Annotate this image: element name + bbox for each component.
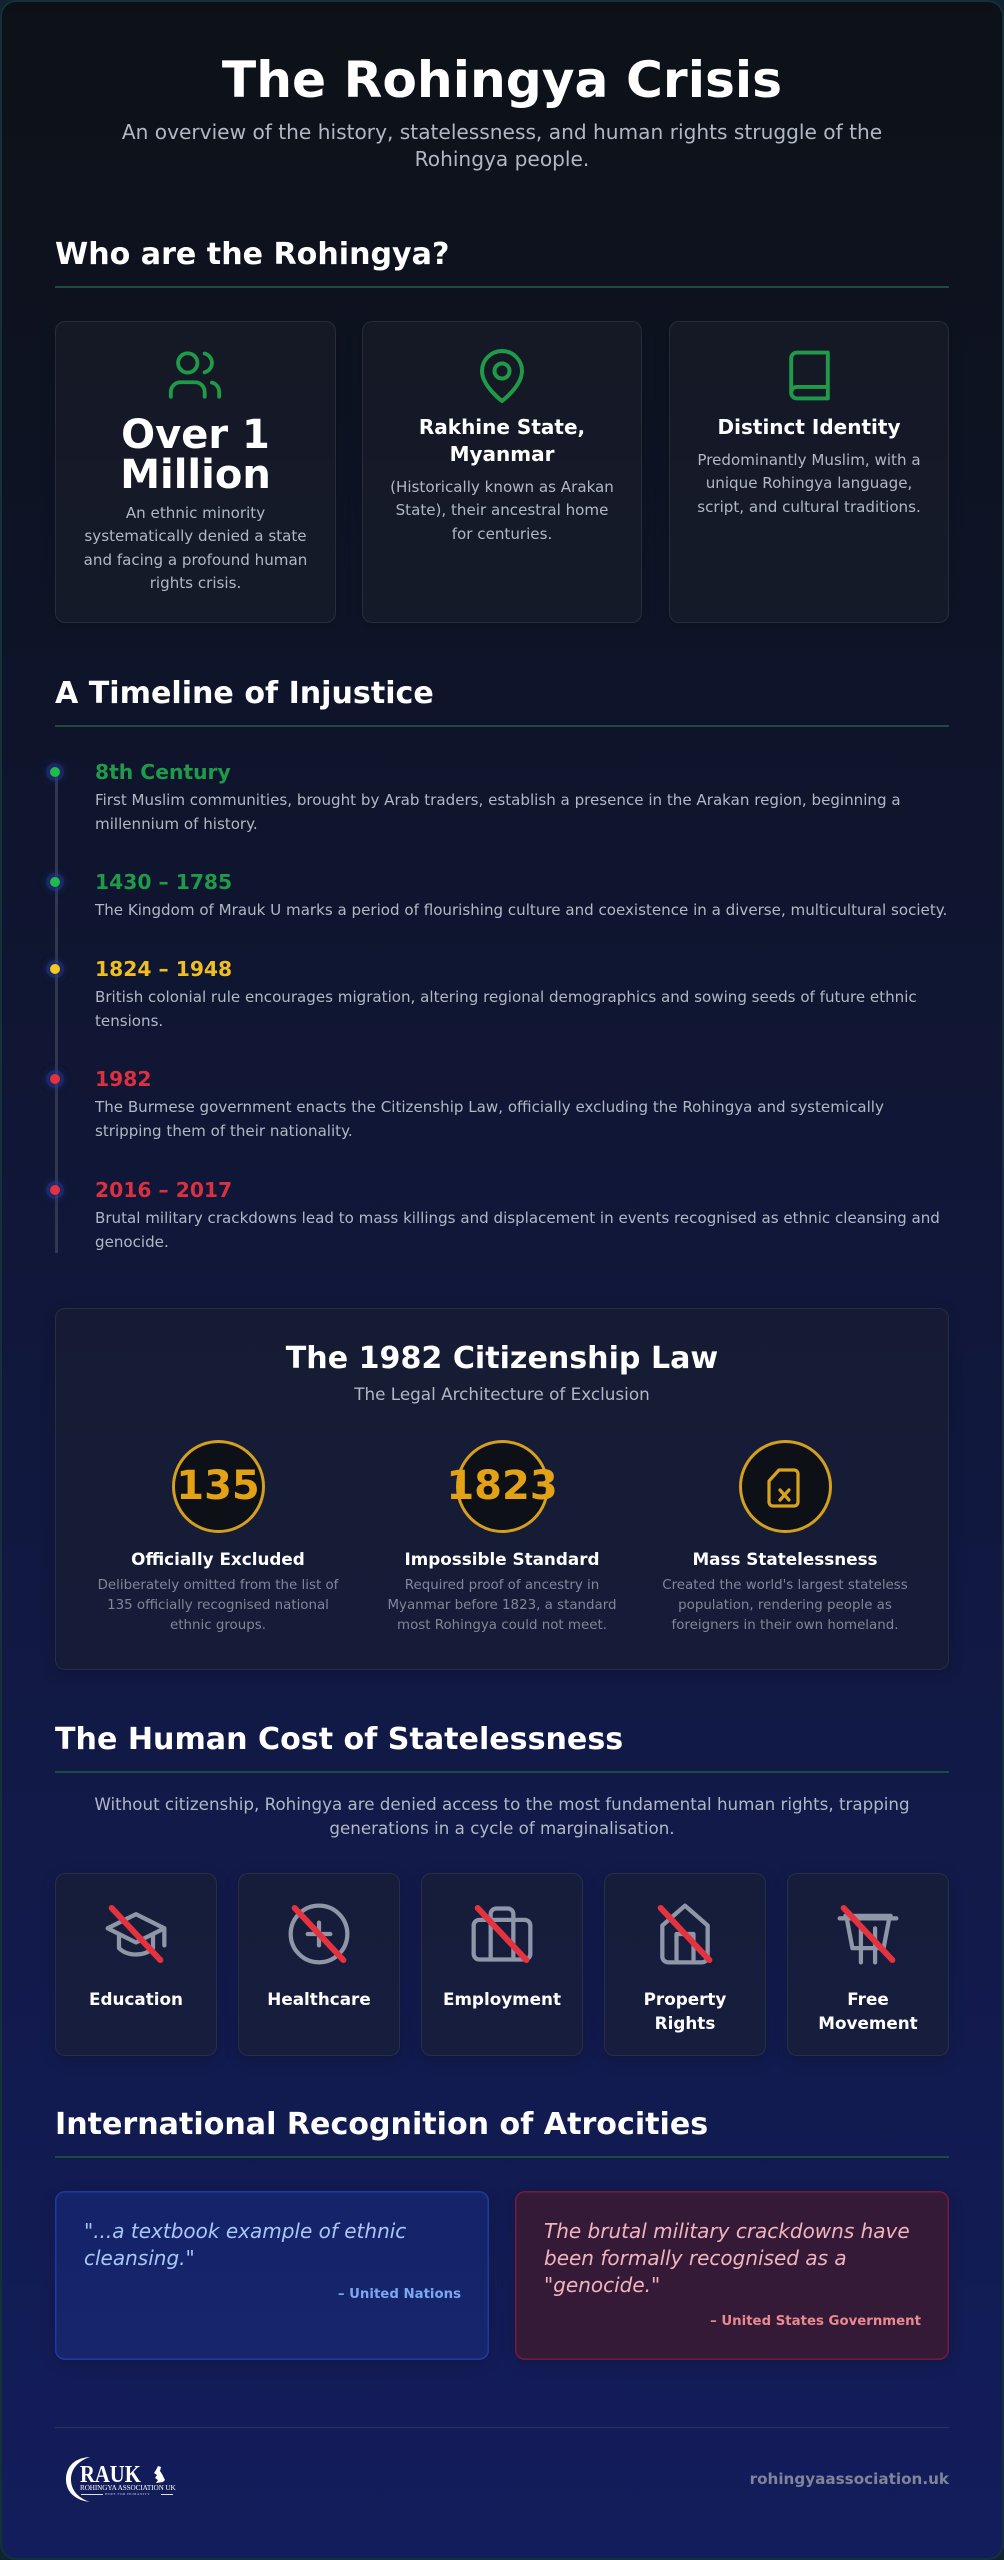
quote text: been formally recognised as a bbox=[544, 2246, 847, 2270]
label bbox=[818, 1989, 918, 2032]
card title bbox=[419, 415, 585, 466]
badge: 135 bbox=[172, 1440, 265, 1533]
timeline event: 8th century: First Muslim communities, brought by Arab traders, establish a presence in the Arakan region, beginning a bbox=[95, 791, 901, 809]
timeline event: 1982: stripping them of their nationality. bbox=[95, 1122, 353, 1140]
attribution: – United Nations bbox=[338, 2287, 461, 2302]
label: Movement bbox=[818, 2012, 918, 2032]
timeline event: 1824-1948: British colonial rule encourages migration, altering regional demographics and sowing seeds of future ethnic bbox=[95, 988, 917, 1006]
description: An ethnic minority bbox=[126, 504, 265, 522]
description: (Historically known as Arakan bbox=[390, 478, 614, 496]
panel: distinct identity bbox=[669, 321, 949, 623]
label: Healthcare bbox=[267, 1989, 371, 2009]
panel: property rights bbox=[604, 1873, 766, 2056]
column title: Officially Excluded bbox=[131, 1549, 305, 1569]
icon: book bbox=[789, 350, 830, 400]
panel: 1982 citizenship law bbox=[55, 1308, 949, 1670]
badge: document with cross bbox=[739, 1440, 832, 1533]
panel heading: The 1982 Citizenship Law bbox=[286, 1341, 718, 1376]
icon: barrier crossed out bbox=[838, 1905, 898, 1964]
quote text: "genocide." bbox=[544, 2273, 660, 2297]
column text bbox=[662, 1578, 908, 1633]
timeline event: 8th century: 8th Century bbox=[95, 760, 231, 784]
label: Education bbox=[89, 1989, 183, 2009]
logo tagline: ROHINGYA ASSOCIATION UK bbox=[80, 2484, 176, 2492]
icon: crescent bbox=[66, 2457, 90, 2502]
column text: 135 officially recognised national bbox=[107, 1598, 329, 1613]
description: and facing a profound human bbox=[84, 551, 307, 569]
description: script, and cultural traditions. bbox=[697, 498, 921, 516]
column: mass statelessness bbox=[662, 1440, 908, 1633]
quote text: The brutal military crackdowns have bbox=[544, 2219, 910, 2243]
card title: Myanmar bbox=[450, 442, 554, 466]
heading: timeline: A Timeline of Injustice bbox=[55, 676, 434, 711]
timeline event: 1982 bbox=[44, 1067, 884, 1140]
quote text: "...a textbook example of ethnic bbox=[84, 2219, 406, 2243]
timeline event: 1982: The Burmese government enacts the Citizenship Law, officially excluding the Rohingya and systemically bbox=[95, 1098, 884, 1116]
timeline event: 1430-1785: 1430 – 1785 bbox=[95, 870, 232, 894]
statistic: over 1 million: Over 1 bbox=[121, 412, 270, 458]
callout: United Nations quote bbox=[55, 2191, 489, 2360]
column: impossible standard bbox=[388, 1440, 616, 1633]
description: Predominantly Muslim, with a bbox=[697, 451, 921, 469]
icon: graduation cap crossed out bbox=[106, 1905, 166, 1963]
column text bbox=[98, 1578, 339, 1633]
column: officially excluded: 135 bbox=[176, 1463, 260, 1509]
title: The Rohingya Crisis bbox=[222, 50, 782, 109]
description: rights crisis. bbox=[150, 574, 241, 592]
column text: most Rohingya could not meet. bbox=[397, 1618, 607, 1633]
intro text: generations in a cycle of marginalisation. bbox=[329, 1818, 675, 1838]
intro text bbox=[94, 1794, 910, 1838]
description bbox=[390, 478, 614, 543]
card title: Distinct Identity bbox=[718, 415, 900, 439]
panel: employment bbox=[421, 1873, 583, 2056]
callout: United States quote bbox=[515, 2191, 949, 2360]
panel: free movement bbox=[787, 1873, 949, 2056]
heading: international recognition: International Recognition of Atrocities bbox=[55, 2107, 708, 2142]
logo motto: HOPE FOR HUMANITY bbox=[105, 2492, 150, 2496]
column text bbox=[388, 1578, 616, 1633]
column text: Myanmar before 1823, a standard bbox=[388, 1598, 616, 1613]
panel subheading: The Legal Architecture of Exclusion bbox=[354, 1384, 650, 1404]
icon: medical cross crossed out bbox=[288, 1904, 350, 1964]
label: Property bbox=[644, 1989, 726, 2009]
timeline event: 1982: 1982 bbox=[95, 1067, 151, 1091]
quote text: cleansing." bbox=[84, 2246, 195, 2270]
label: Free bbox=[847, 1989, 889, 2009]
column title: Impossible Standard bbox=[404, 1549, 600, 1569]
quote text bbox=[84, 2219, 406, 2270]
logo wordmark: RAUK bbox=[80, 2462, 141, 2488]
footer website: rohingyaassociation.uk bbox=[750, 2470, 949, 2488]
column text: foreigners in their own homeland. bbox=[672, 1618, 898, 1633]
statistic: over 1 million: Million bbox=[120, 452, 271, 498]
label: Rights bbox=[655, 2012, 715, 2032]
card title: Rakhine State, bbox=[419, 415, 585, 439]
timeline event: 1824-1948: 1824 – 1948 bbox=[95, 957, 232, 981]
timeline event: 8th century: millennium of history. bbox=[95, 814, 258, 832]
statistic: over 1 million bbox=[120, 412, 271, 498]
timeline event: 2016-2017: genocide. bbox=[95, 1232, 169, 1250]
column: officially excluded bbox=[98, 1440, 339, 1633]
timeline event: 2016-2017: 2016 – 2017 bbox=[95, 1178, 232, 1202]
icon: briefcase crossed out bbox=[472, 1905, 532, 1963]
timeline event: 1430-1785 bbox=[44, 870, 947, 919]
icon: people bbox=[168, 351, 222, 399]
timeline event: 2016-2017: Brutal military crackdowns lead to mass killings and displacement in events recognised as ethnic cleansing and bbox=[95, 1209, 940, 1227]
label: Employment bbox=[443, 1989, 561, 2009]
column text: population, rendering people as bbox=[678, 1598, 892, 1613]
panel: Rakhine State bbox=[362, 321, 642, 623]
subtitle bbox=[122, 120, 882, 170]
panel: over 1 million bbox=[55, 321, 336, 623]
label bbox=[644, 1989, 726, 2032]
subtitle: An overview of the history, statelessness, and human rights struggle of the bbox=[122, 120, 882, 144]
timeline event: 1824-1948 bbox=[44, 957, 917, 1030]
column text: Created the world's largest stateless bbox=[662, 1578, 908, 1593]
panel: education bbox=[55, 1873, 217, 2056]
logo: Rohingya Association UK bbox=[66, 2457, 176, 2502]
timeline event: 2016-2017 bbox=[44, 1178, 940, 1250]
timeline bbox=[44, 760, 947, 1253]
description: State), their ancestral home bbox=[396, 501, 608, 519]
column title: Mass Statelessness bbox=[692, 1549, 878, 1569]
icon: house crossed out bbox=[658, 1904, 712, 1964]
timeline event: 1824-1948: tensions. bbox=[95, 1012, 163, 1030]
quote text bbox=[544, 2219, 910, 2297]
heading: human cost: The Human Cost of Statelessness bbox=[55, 1722, 623, 1757]
panel: healthcare bbox=[238, 1873, 400, 2056]
heading: who are the Rohingya: Who are the Rohingya? bbox=[55, 237, 449, 272]
description: systematically denied a state bbox=[84, 527, 307, 545]
icon: map pin bbox=[480, 349, 524, 403]
attribution: – United States Government bbox=[710, 2314, 921, 2329]
description bbox=[84, 504, 307, 592]
description bbox=[697, 451, 921, 516]
icon: map of UK bbox=[154, 2466, 165, 2483]
timeline event: 8th century bbox=[44, 760, 901, 832]
column: impossible standard: 1823 bbox=[446, 1463, 558, 1509]
column text: Deliberately omitted from the list of bbox=[98, 1578, 338, 1593]
badge: 1823 bbox=[456, 1440, 549, 1533]
timeline event: 1430-1785: The Kingdom of Mrauk U marks a period of flourishing culture and coexistence in a diverse, multicultural society. bbox=[95, 901, 947, 919]
description: for centuries. bbox=[452, 525, 552, 543]
column text: Required proof of ancestry in bbox=[405, 1578, 599, 1593]
description: unique Rohingya language, bbox=[706, 474, 912, 492]
subtitle: Rohingya people. bbox=[415, 146, 589, 170]
intro text: Without citizenship, Rohingya are denied access to the most fundamental human rights, trapping bbox=[94, 1794, 910, 1814]
column text: ethnic groups. bbox=[170, 1618, 266, 1633]
